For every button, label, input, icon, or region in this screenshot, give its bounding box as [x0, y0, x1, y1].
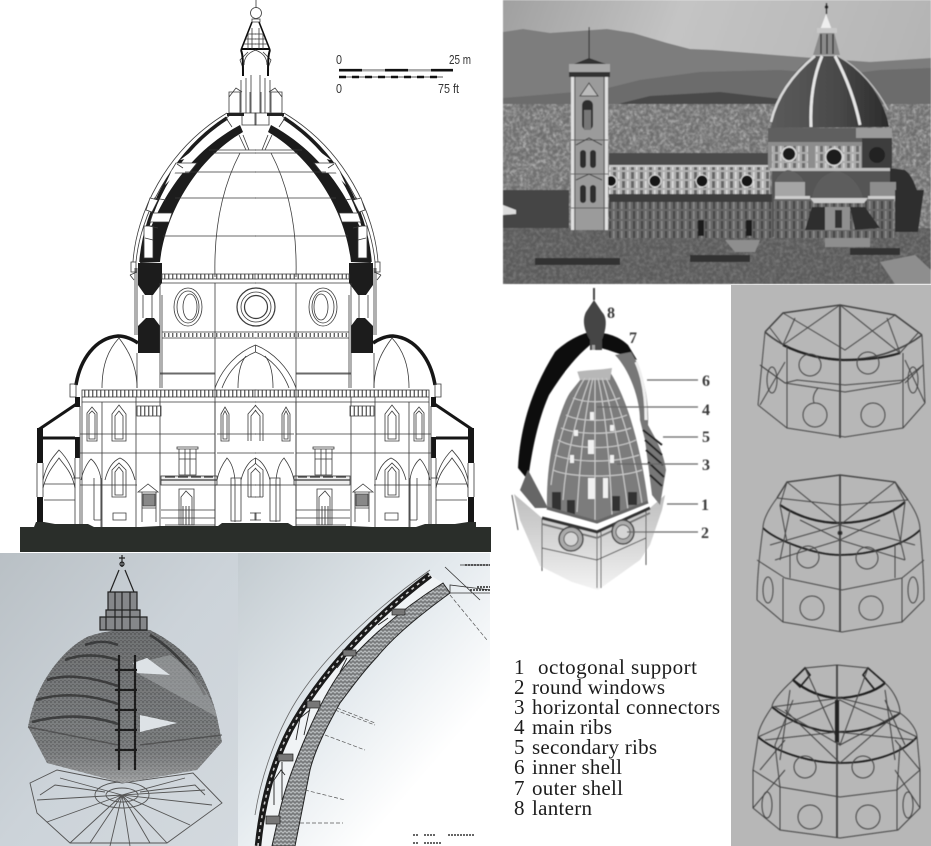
panel: labelled dome cutaway — [512, 288, 710, 590]
panel: shell section detail — [238, 553, 490, 846]
panel: photograph of the cathedral — [503, 0, 931, 284]
legend text block: 1 — [514, 655, 524, 679]
panel: construction wireframe stages — [731, 285, 931, 846]
wireframe stage 1 — [758, 305, 925, 438]
outer shell in black — [518, 332, 637, 480]
callout numbers: 1 — [701, 497, 709, 514]
legend text block: lantern — [532, 796, 592, 820]
callout numbers: 6 — [702, 373, 710, 390]
scale labels: 0 — [336, 81, 342, 96]
panel: cathedral cross-section drawing — [20, 0, 491, 552]
callout numbers: 4 — [702, 402, 710, 419]
callout leader lines — [597, 380, 698, 532]
callout numbers — [607, 305, 710, 542]
legend text block: main ribs — [532, 715, 612, 739]
left half of section — [37, 22, 256, 527]
legend text block: 7 — [514, 776, 524, 800]
mirrored right half of section — [255, 22, 474, 527]
legend text block: horizontal connectors — [532, 695, 720, 719]
cutaway openings — [133, 658, 170, 675]
brick dome body — [28, 555, 222, 783]
legend text block: inner shell — [532, 755, 622, 779]
nave — [606, 153, 774, 238]
lower right caption marks — [413, 835, 474, 843]
scale labels — [336, 52, 471, 96]
legend text block: outer shell — [532, 776, 623, 800]
upper right dimension marks — [445, 565, 490, 600]
central axis details — [237, 0, 275, 463]
dome with white ribs — [771, 3, 889, 128]
octagonal drum — [514, 494, 665, 590]
callout numbers: 3 — [702, 457, 710, 474]
wireframe stage 3 — [753, 665, 920, 838]
foundation band — [20, 522, 491, 552]
callout numbers: 7 — [629, 330, 637, 347]
callout numbers: 5 — [702, 429, 710, 446]
legend text block: round windows — [532, 675, 665, 699]
legend text block: 2 — [514, 675, 524, 699]
foreground roofs — [503, 228, 931, 284]
bell tower — [569, 27, 610, 230]
octagonal floor plan — [30, 770, 222, 846]
scale bar — [336, 52, 471, 96]
lantern — [584, 300, 606, 350]
gallery blocks — [266, 609, 405, 824]
scale labels: 25 m — [449, 52, 471, 67]
inner dome ribs — [547, 372, 648, 522]
sky — [503, 0, 931, 284]
panel: isometric brick dome drawing — [0, 553, 238, 846]
drum — [768, 128, 892, 172]
city — [503, 104, 931, 234]
legend text block: 4 — [514, 715, 525, 739]
callout numbers: 8 — [607, 305, 615, 322]
apse and tribunes — [772, 168, 924, 238]
legend text block: 5 — [514, 735, 524, 759]
outer shell — [258, 575, 430, 846]
scale labels: 0 — [336, 52, 342, 67]
legend text block: 8 — [514, 796, 524, 820]
thin outer arc — [255, 570, 430, 815]
gallery arches — [274, 618, 388, 805]
mountains — [503, 29, 931, 110]
legend text block — [514, 655, 720, 820]
callout numbers: 2 — [701, 525, 709, 542]
radial dimension lines — [300, 595, 487, 823]
legend text block: 6 — [514, 755, 524, 779]
inner shell — [272, 583, 450, 846]
lantern on top — [100, 555, 147, 630]
legend text block: 3 — [514, 695, 524, 719]
legend text block: secondary ribs — [532, 735, 657, 759]
scale labels: 75 ft — [438, 81, 459, 96]
legend text block: octogonal support — [538, 655, 697, 679]
central ladder rib — [115, 655, 137, 770]
wireframe stage 2 — [757, 475, 924, 632]
gallery between shells — [258, 575, 443, 846]
